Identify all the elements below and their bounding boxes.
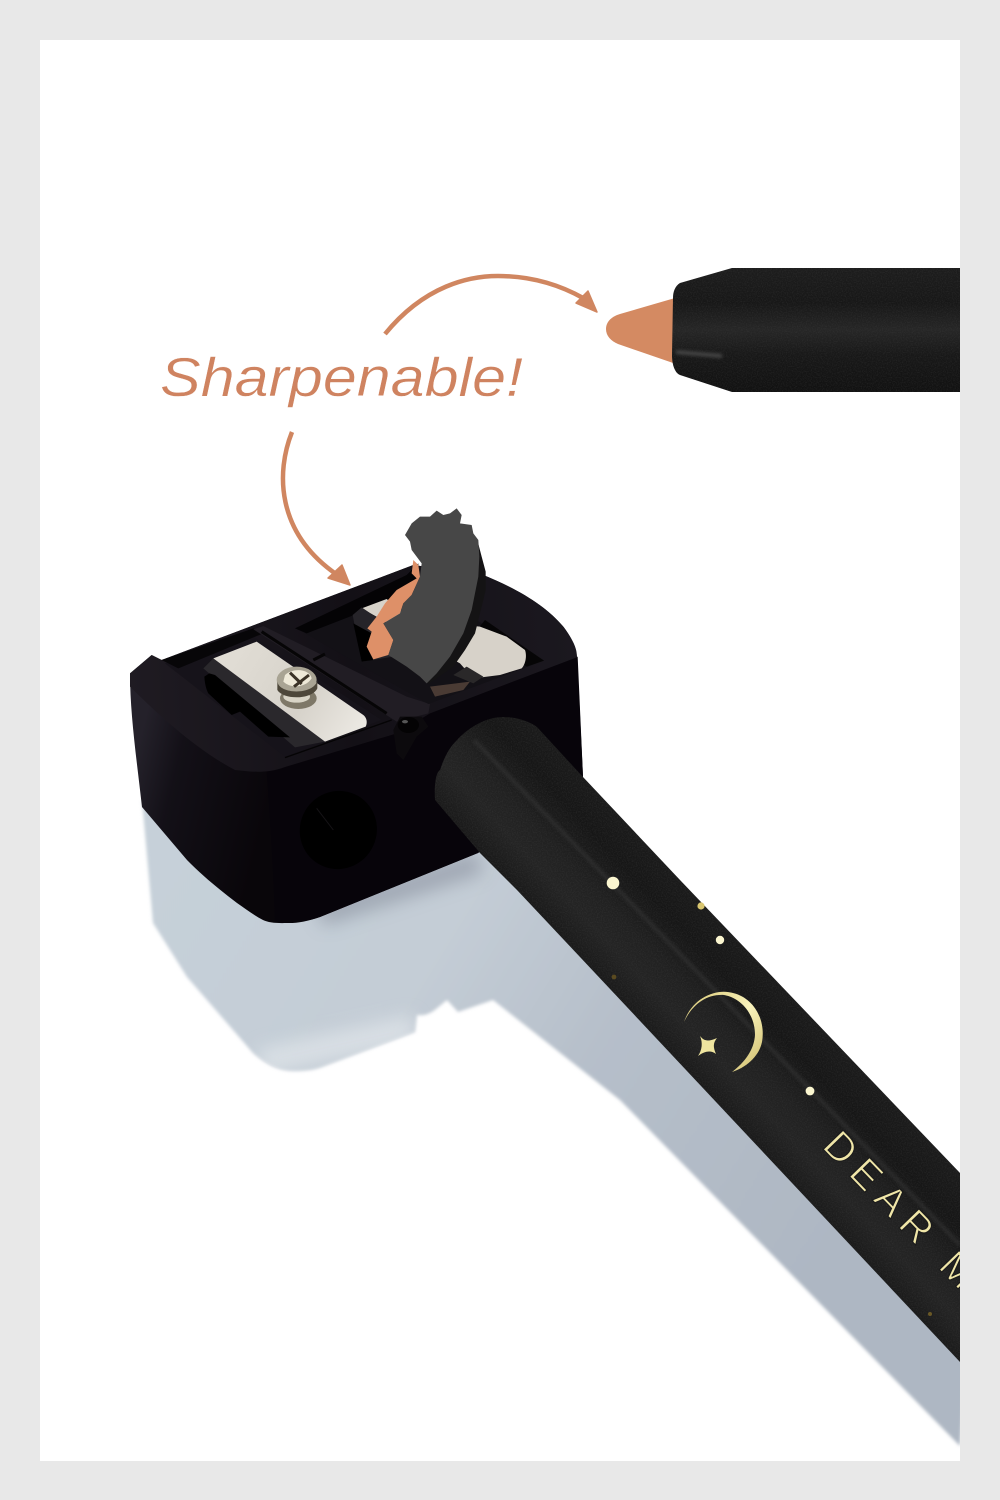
- right blade steel: [362, 599, 526, 678]
- sharpener: [130, 508, 583, 923]
- pencil barrel: [435, 717, 960, 1362]
- right compartment: [295, 563, 544, 704]
- four-point star: [698, 1036, 717, 1056]
- sharpener front face: [308, 656, 583, 920]
- screw: [277, 667, 317, 709]
- wood shaving: grey side: [383, 508, 479, 683]
- centre divider: [253, 626, 430, 722]
- gold dots: [607, 877, 932, 1316]
- left compartment: [162, 628, 392, 758]
- arrow to pencil tip: [385, 276, 597, 334]
- reflection on surface: [142, 800, 970, 1446]
- right blade dark edge: [352, 608, 391, 660]
- crescent moon logo: [684, 992, 763, 1072]
- pencil sheen: [474, 740, 960, 1245]
- brand name on pencil: DEAR M: [815, 1123, 992, 1304]
- lower pencil: [435, 717, 992, 1362]
- heading: Sharpenable!: [160, 346, 523, 408]
- left slot: [204, 673, 290, 737]
- left blade steel: [213, 642, 367, 742]
- rubber stud: [394, 716, 422, 734]
- pencil body: [672, 268, 960, 392]
- sharpener top face: [130, 565, 577, 772]
- wood shaving: orange side: [367, 560, 420, 659]
- left blade dark edge: [203, 658, 325, 747]
- sharpener body: [130, 565, 583, 923]
- arrow to sharpener: [283, 432, 350, 585]
- black wedge: [353, 623, 373, 662]
- back slot: [295, 563, 418, 633]
- product photo group: [130, 268, 992, 1446]
- wood shaving: dark rim: [449, 544, 486, 662]
- sharpener pencil hole: [300, 791, 377, 869]
- upper pencil tip: [606, 268, 960, 392]
- left lid seam: [285, 720, 392, 758]
- ring sheen: [676, 352, 722, 356]
- colour lead tip: [606, 298, 676, 364]
